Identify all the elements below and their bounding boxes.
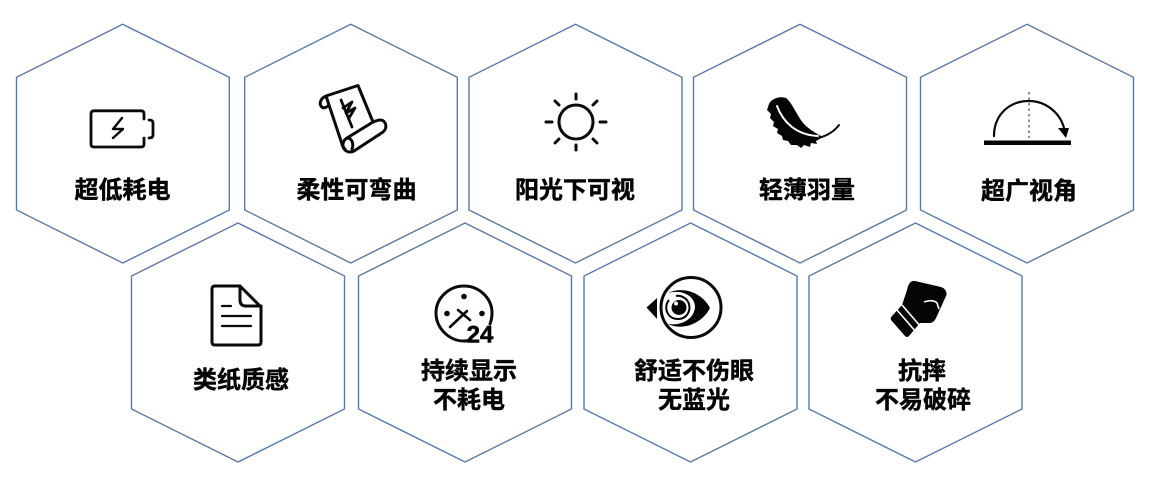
icon: scroll	[320, 86, 386, 152]
label: 24: 24	[467, 322, 494, 348]
panel: shatter resistant	[809, 223, 1022, 462]
label: 阳光下可视	[515, 177, 635, 204]
icon: sun	[546, 94, 606, 150]
label: 类纸质感	[193, 366, 289, 394]
label: 柔性可弯曲	[296, 176, 416, 204]
panel: flexible	[245, 24, 457, 263]
icon: feather	[767, 97, 839, 148]
panel: paper texture	[132, 223, 344, 462]
label: 抗摔	[898, 358, 946, 385]
label: 超低耗电	[74, 177, 170, 204]
panel: ultra-low power	[16, 24, 229, 263]
icon: eye	[646, 278, 721, 338]
panel: continuous display	[358, 223, 572, 462]
label: 无蓝光	[658, 387, 730, 414]
label: 轻薄羽量	[759, 177, 855, 204]
label: 不易破碎	[875, 387, 971, 414]
panel: sunlight readable	[469, 24, 682, 263]
label: 舒适不伤眼	[634, 358, 754, 385]
icon: document	[212, 286, 261, 345]
icon: viewing angle arc	[984, 92, 1071, 145]
icon: boxing glove	[891, 281, 947, 337]
panel: eye comfort	[584, 223, 797, 462]
label: 超广视角	[981, 178, 1077, 205]
icon: battery	[91, 111, 153, 147]
label: 持续显示	[421, 358, 517, 385]
label: 不耗电	[433, 387, 505, 414]
panel: wide viewing angle	[920, 24, 1134, 263]
panel: thin and light	[694, 24, 906, 263]
icon: 24-hour clock	[436, 286, 494, 348]
